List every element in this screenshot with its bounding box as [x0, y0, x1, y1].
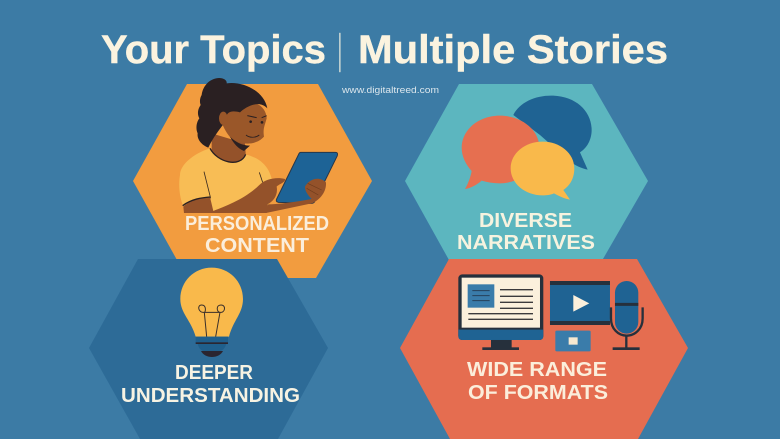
label: diverse narratives: [457, 210, 595, 254]
title: [101, 28, 668, 72]
label: personalized content: PERSONALIZED: [185, 213, 329, 235]
website url: www.digitaltreed.com: [341, 85, 439, 96]
label: wide range of formats: WIDE RANGE: [467, 359, 607, 381]
panel: personalized content: [133, 78, 372, 278]
title: Multiple Stories: [358, 28, 668, 72]
icon: media formats: [458, 274, 643, 351]
icon: person with tablet: [179, 78, 338, 213]
label: deeper understanding: UNDERSTANDING: [121, 385, 300, 407]
title: Your Topics: [101, 28, 326, 72]
label: deeper understanding: [121, 362, 300, 407]
label: diverse narratives: NARRATIVES: [457, 232, 595, 254]
icon: light bulb: [180, 268, 243, 357]
label: personalized content: [185, 213, 329, 257]
label: diverse narratives: DIVERSE: [479, 210, 572, 232]
label: wide range of formats: OF FORMATS: [468, 382, 608, 404]
label: personalized content: CONTENT: [205, 235, 309, 257]
panel: wide range of formats: [400, 259, 688, 439]
label: deeper understanding: DEEPER: [175, 362, 254, 384]
icon: speech bubbles: [462, 96, 592, 200]
panel: deeper understanding: [89, 259, 328, 439]
panel: diverse narratives: [405, 84, 648, 278]
label: wide range of formats: [467, 359, 608, 404]
